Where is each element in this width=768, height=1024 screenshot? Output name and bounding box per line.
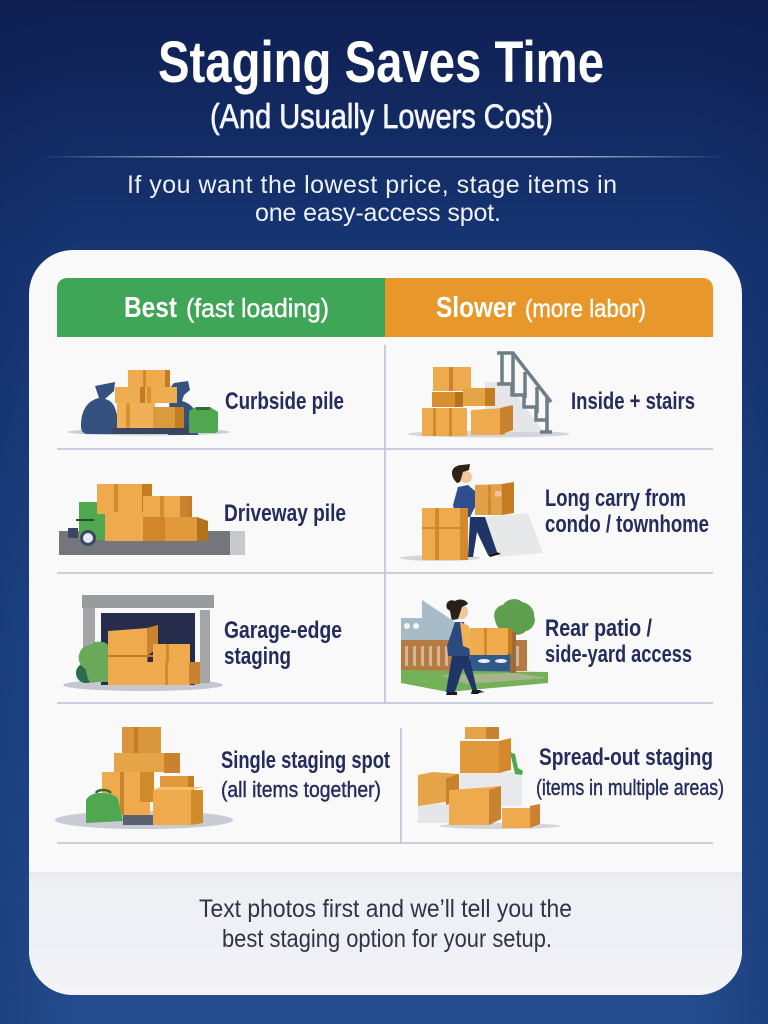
icon: curbside pile <box>68 370 230 436</box>
header: best column <box>57 278 385 337</box>
subtitle: (And Usually Lowers Cost) <box>210 98 553 136</box>
label: long carry: condo / townhome <box>545 511 709 538</box>
icon: driveway pile <box>59 484 245 555</box>
label: long carry <box>545 485 709 538</box>
label: single staging spot: Single staging spot <box>221 747 390 774</box>
header: best column: (fast loading) <box>186 293 329 323</box>
footer text <box>199 895 572 953</box>
panel: comparison card <box>29 250 742 995</box>
icon: spread-out staging <box>418 727 560 829</box>
label: driveway pile: Driveway pile <box>224 500 346 527</box>
label: single staging spot: (all items together) <box>221 777 381 802</box>
title: Staging Saves Time <box>158 30 604 95</box>
icon: rear patio <box>401 599 548 695</box>
label: garage-edge staging: staging <box>224 643 291 670</box>
label: garage-edge staging <box>224 617 342 670</box>
header: best column: Best <box>124 292 177 324</box>
label: spread-out staging: Spread-out staging <box>539 744 713 771</box>
label: garage-edge staging: Garage-edge <box>224 617 342 644</box>
icon: garage-edge staging <box>63 595 223 691</box>
label: rear patio <box>545 615 692 668</box>
header: slower column <box>385 278 713 337</box>
label: single staging spot <box>221 747 390 802</box>
footer text: best staging option for your setup. <box>222 925 552 953</box>
header: slower column: Slower <box>436 292 516 324</box>
label: spread-out staging <box>536 744 724 800</box>
label: spread-out staging: (items in multiple areas) <box>536 775 724 800</box>
label: rear patio: side-yard access <box>545 641 692 668</box>
intro text <box>127 171 617 227</box>
label: curbside pile: Curbside pile <box>225 388 344 415</box>
label: inside and stairs: Inside + stairs <box>571 388 695 415</box>
label: long carry: Long carry from <box>545 485 686 512</box>
intro text: one easy-access spot. <box>255 199 501 227</box>
label: rear patio: Rear patio / <box>545 615 652 642</box>
icon: long carry <box>400 464 543 561</box>
icon: single staging spot <box>55 727 233 829</box>
footer text: Text photos first and we’ll tell you the <box>199 895 572 923</box>
header: slower column: (more labor) <box>525 295 646 323</box>
icon: inside and stairs <box>408 353 570 438</box>
intro text: If you want the lowest price, stage items in <box>127 171 617 199</box>
